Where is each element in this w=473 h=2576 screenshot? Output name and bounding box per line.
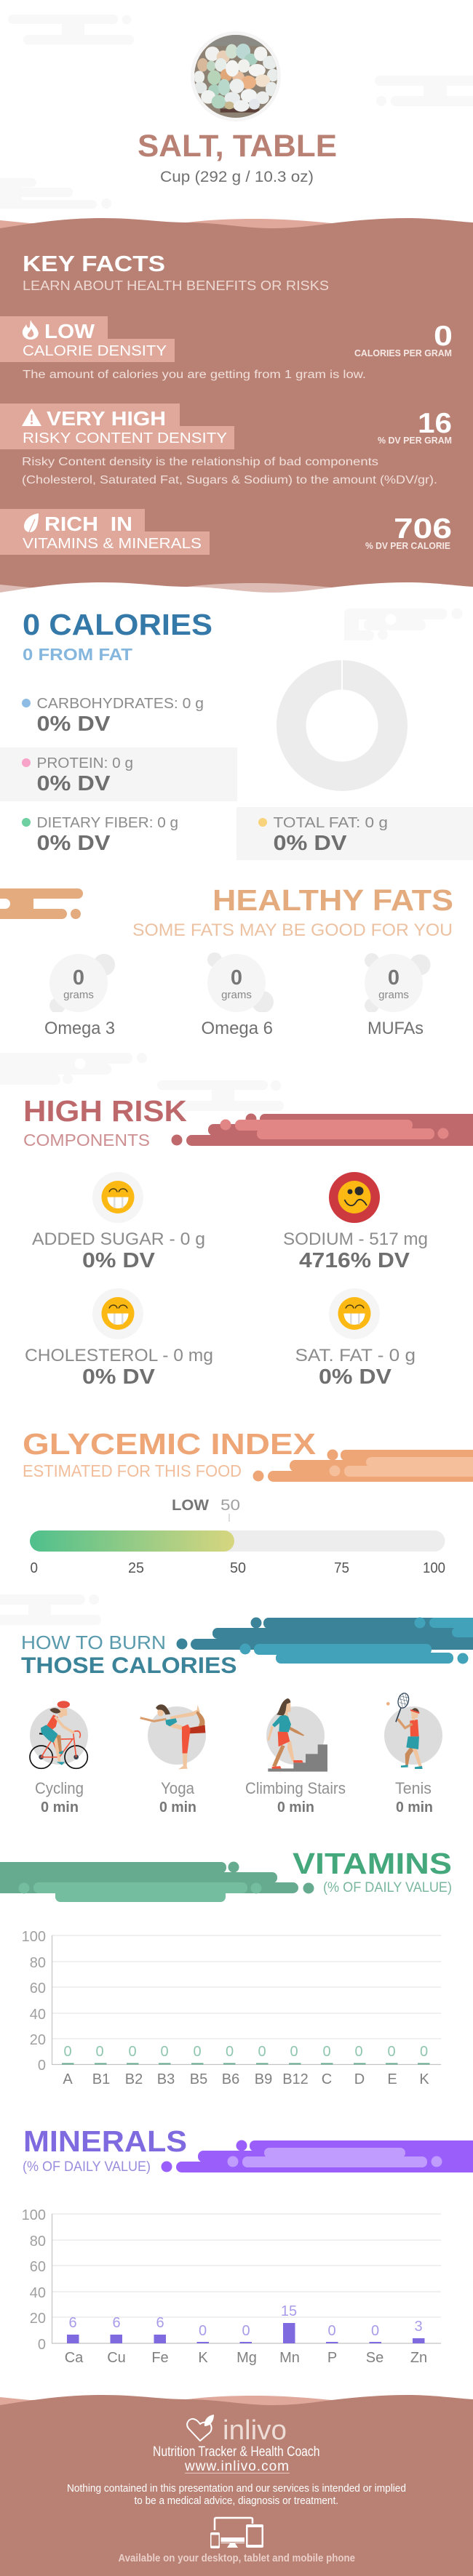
fact: rich in vitamins and minerals	[0, 509, 452, 555]
bar chart: minerals: 3	[414, 2319, 423, 2335]
bar chart: vitamins: 0	[160, 2044, 169, 2060]
icon: yoga figure	[140, 1704, 205, 1769]
decoration: orange bars	[253, 1450, 473, 1482]
bar chart: minerals: 6	[156, 2315, 164, 2331]
bar chart: vitamins: 0	[258, 2044, 266, 2060]
gauge scale: 75	[334, 1560, 349, 1576]
bar chart: minerals	[22, 2207, 441, 2366]
gauge value: 50	[220, 1496, 240, 1514]
activity: tennis: Tenis	[395, 1779, 432, 1797]
fact: risky content density: Risky Content density is the relationship of bad components	[22, 456, 378, 468]
fact: calorie density: LOW	[44, 320, 95, 342]
subheading: ESTIMATED FOR THIS FOOD	[23, 1461, 242, 1480]
item: saturated fat: SAT. FAT - 0 g	[295, 1346, 416, 1365]
fact: risky content density: (Cholesterol, Saturated Fat, Sugars & Sodium) to the amount (%DV/gr).	[22, 474, 437, 486]
tagline: Nutrition Tracker & Health Coach	[153, 2444, 320, 2460]
activity: climbing stairs: Climbing Stairs	[245, 1779, 346, 1797]
bar chart: vitamins: E	[387, 2071, 397, 2087]
item: cholesterol: 0% DV	[82, 1365, 156, 1389]
subheading: (% OF DAILY VALUE)	[23, 2159, 151, 2175]
bar chart: vitamins: 0	[420, 2044, 428, 2060]
icon: tennis player	[386, 1692, 423, 1769]
logo: inlivo	[187, 2415, 287, 2446]
panel: healthy fats	[0, 883, 453, 1038]
bar chart: minerals: 100	[22, 2207, 46, 2223]
bar chart: vitamins: A	[63, 2071, 73, 2087]
gauge value	[172, 1496, 240, 1522]
macro: protein: 0% DV	[36, 772, 111, 795]
bar chart: vitamins: 0	[95, 2044, 104, 2060]
subheading: from fat: 0 FROM FAT	[23, 645, 132, 664]
bar chart: vitamins: B2	[125, 2071, 143, 2087]
subheading: components: COMPONENTS	[23, 1131, 150, 1149]
macro: dietary fiber	[22, 815, 178, 855]
bar chart: vitamins: 0	[38, 2058, 46, 2074]
activity: yoga: Yoga	[161, 1779, 195, 1797]
decoration: red bars	[172, 1114, 473, 1146]
icon: cyclist	[30, 1701, 87, 1768]
bar chart: minerals: Mn	[279, 2350, 300, 2366]
activity: climbing stairs	[245, 1698, 346, 1815]
heading: high risk: HIGH RISK	[23, 1094, 187, 1128]
activity: cycling	[30, 1701, 88, 1815]
decoration: orange bars	[0, 888, 84, 919]
disclaimer: to be a medical advice, diagnosis or treatment.	[134, 2495, 338, 2507]
icon: happy face	[102, 1297, 134, 1330]
panel: high risk components	[23, 1094, 473, 1389]
item: omega 3	[44, 954, 115, 1038]
activity: tennis: 0 min	[396, 1799, 433, 1815]
panel: title header	[138, 31, 337, 185]
panel: key facts	[0, 218, 473, 603]
item: cholesterol: CHOLESTEROL - 0 mg	[25, 1346, 213, 1365]
gauge scale: 50	[230, 1560, 246, 1576]
icon: flame	[23, 320, 39, 340]
bar chart: vitamins: 0	[226, 2044, 234, 2060]
heading: how to burn: HOW TO BURN	[21, 1632, 166, 1653]
item: added sugar: ADDED SUGAR - 0 g	[32, 1229, 205, 1249]
fact: calorie density: The amount of calories you are getting from 1 gram is low.	[23, 369, 366, 381]
macro: carbohydrates: CARBOHYDRATES: 0 g	[36, 696, 204, 712]
serving size: Cup (292 g / 10.3 oz)	[160, 169, 314, 185]
item: omega 6: Omega 6	[201, 1019, 273, 1038]
bar chart: vitamins: 60	[30, 1981, 46, 1997]
bar chart: vitamins: 80	[30, 1955, 46, 1971]
decoration: purple bars	[162, 2140, 473, 2172]
fact: risky content density: % DV PER GRAM	[378, 436, 452, 446]
bar chart: vitamins: 100	[22, 1929, 46, 1945]
macro: total fat	[236, 807, 473, 860]
gauge scale: 100	[423, 1560, 445, 1576]
bar chart: vitamins: 0	[63, 2044, 72, 2060]
panel: minerals	[22, 2124, 473, 2366]
macro: carbohydrates	[22, 696, 204, 736]
bar chart: minerals: Mg	[236, 2350, 257, 2366]
fact: rich in vitamins and minerals: VITAMINS & MINERALS	[23, 536, 202, 552]
item: omega 3: 0	[73, 966, 84, 990]
item: omega 3: grams	[63, 989, 94, 1001]
item: mufas: grams	[378, 989, 409, 1001]
bar chart: vitamins: 0	[128, 2044, 137, 2060]
bar chart: vitamins: 40	[30, 2007, 46, 2023]
bar chart: vitamins: 0	[290, 2044, 298, 2060]
website link: www.inlivo.com	[184, 2459, 289, 2474]
macro: dietary fiber: DIETARY FIBER: 0 g	[36, 815, 178, 831]
fact: calorie density: CALORIE DENSITY	[23, 343, 167, 359]
gauge scale: 25	[128, 1560, 144, 1576]
fact: calorie density	[0, 316, 453, 381]
activity: yoga: 0 min	[159, 1799, 196, 1815]
item: omega 3: Omega 3	[44, 1019, 115, 1038]
item: sodium	[283, 1172, 428, 1272]
donut chart	[291, 660, 393, 777]
bar chart: minerals: 6	[68, 2315, 77, 2331]
food photo: eggs in circle	[191, 31, 281, 121]
item: added sugar: 0% DV	[82, 1249, 156, 1272]
bar chart: vitamins: C	[322, 2071, 332, 2087]
bar chart: minerals: 40	[30, 2285, 46, 2301]
panel: how to burn calories	[21, 1617, 473, 1815]
item: saturated fat	[295, 1288, 416, 1389]
bar chart: minerals: Se	[366, 2350, 383, 2366]
bar chart: minerals: Cu	[107, 2350, 126, 2366]
heading: key facts: KEY FACTS	[23, 251, 165, 276]
bar chart: minerals: Fe	[151, 2350, 169, 2366]
item: mufas: MUFAs	[367, 1019, 424, 1038]
decoration: green bars	[0, 1861, 314, 1902]
activity: cycling: 0 min	[41, 1799, 79, 1815]
icon: leaf	[24, 513, 39, 532]
item: saturated fat: 0% DV	[319, 1365, 392, 1389]
bar chart: vitamins: B6	[222, 2071, 239, 2087]
activity: climbing stairs: 0 min	[277, 1799, 314, 1815]
bar chart: vitamins: 0	[322, 2044, 331, 2060]
macro: total fat: 0% DV	[274, 832, 347, 855]
bar chart: minerals: 0	[371, 2323, 379, 2339]
panel: glycemic index	[23, 1427, 473, 1576]
heading: glycemic index: GLYCEMIC INDEX	[23, 1427, 316, 1461]
fact: rich in vitamins and minerals: RICH IN	[44, 513, 132, 535]
gauge scale	[31, 1560, 445, 1576]
bar chart: minerals: 0	[242, 2323, 250, 2339]
bar chart: vitamins: 0	[354, 2044, 363, 2060]
activity: tennis	[384, 1692, 442, 1815]
fact: rich in vitamins and minerals: 706	[394, 513, 452, 545]
subheading: (% OF DAILY VALUE)	[323, 1880, 452, 1895]
bar chart: minerals: 80	[30, 2234, 46, 2250]
bar chart: minerals: 0	[199, 2323, 207, 2339]
bar chart: minerals: 60	[30, 2259, 46, 2275]
glycemic gauge bar	[30, 1530, 445, 1552]
decoration: teal bars	[176, 1617, 473, 1664]
icon: happy face	[338, 1297, 371, 1330]
icon: warning triangle	[22, 409, 41, 426]
heading: minerals: MINERALS	[23, 2124, 187, 2158]
fact: rich in vitamins and minerals: % DV PER CALORIE	[365, 541, 450, 551]
bar chart: minerals: 15	[281, 2303, 297, 2319]
bar chart: vitamins	[22, 1929, 441, 2087]
fact: risky content density: RISKY CONTENT DENSITY	[23, 430, 227, 446]
bar chart: vitamins: B5	[190, 2071, 207, 2087]
item: added sugar	[32, 1172, 205, 1272]
fact: risky content density: VERY HIGH	[47, 407, 166, 430]
bar chart: vitamins: D	[354, 2071, 365, 2087]
icon: stair climber	[267, 1698, 327, 1772]
heading: calories: 0 CALORIES	[23, 608, 212, 641]
fact: risky content density: 16	[418, 408, 452, 439]
disclaimer: Nothing contained in this presentation and our services is intended or implied	[67, 2483, 406, 2495]
panel: vitamins	[0, 1847, 452, 2087]
icon: devices	[210, 2518, 263, 2548]
fact: calorie density: 0	[434, 321, 453, 352]
item: cholesterol	[25, 1288, 213, 1389]
subheading: LEARN ABOUT HEALTH BENEFITS OR RISKS	[23, 278, 329, 293]
heading: vitamins: VITAMINS	[293, 1847, 452, 1880]
activity: cycling: Cycling	[35, 1779, 84, 1797]
bar chart: minerals: 0	[327, 2323, 336, 2339]
bar chart: vitamins: B3	[157, 2071, 175, 2087]
item: sodium: SODIUM - 517 mg	[283, 1229, 428, 1249]
bar chart: vitamins: B12	[282, 2071, 309, 2087]
heading: those calories: THOSE CALORIES	[21, 1652, 237, 1678]
bar chart: minerals: K	[198, 2350, 208, 2366]
panel: calories	[0, 608, 473, 860]
icon: worried face	[338, 1181, 371, 1213]
item: sodium: 4716% DV	[299, 1249, 410, 1272]
bar chart: vitamins: B9	[255, 2071, 272, 2087]
macro: dietary fiber: 0% DV	[36, 832, 111, 855]
item: mufas	[365, 953, 431, 1038]
fact: risky content density	[0, 404, 452, 486]
bar chart: minerals: 6	[112, 2315, 121, 2331]
bar chart: vitamins: 0	[387, 2044, 396, 2060]
availability note: Available on your desktop, tablet and mobile phone	[118, 2553, 355, 2564]
bar chart: minerals: 0	[38, 2337, 46, 2353]
bar chart: vitamins: K	[419, 2071, 429, 2087]
item: omega 6	[201, 952, 274, 1038]
gauge scale: 0	[31, 1560, 38, 1576]
panel: footer	[0, 2395, 473, 2576]
logo: inlivo: inlivo	[223, 2415, 287, 2446]
bar chart: minerals: P	[327, 2350, 337, 2366]
activity: yoga	[140, 1704, 206, 1815]
macro: protein: PROTEIN: 0 g	[36, 755, 133, 771]
subheading: SOME FATS MAY BE GOOD FOR YOU	[132, 920, 453, 940]
macro: protein	[0, 747, 237, 801]
fact: calorie density: CALORIES PER GRAM	[354, 348, 452, 358]
icon: happy face	[102, 1181, 134, 1213]
macro: carbohydrates: 0% DV	[36, 713, 111, 736]
bar chart: minerals: Zn	[410, 2350, 427, 2366]
bar chart: minerals: 20	[30, 2311, 46, 2327]
macro: total fat: TOTAL FAT: 0 g	[274, 815, 388, 831]
title: SALT, TABLE	[138, 129, 337, 164]
heading: healthy fats: HEALTHY FATS	[212, 883, 453, 917]
item: omega 6: grams	[221, 989, 252, 1001]
disclaimer	[67, 2483, 406, 2507]
bar chart: vitamins: 20	[30, 2032, 46, 2048]
bar chart: minerals: Ca	[65, 2350, 84, 2366]
item: mufas: 0	[388, 966, 400, 990]
item: omega 6: 0	[231, 966, 242, 990]
bar chart: vitamins: 0	[193, 2044, 202, 2060]
gauge value: LOW	[172, 1496, 210, 1514]
bar chart: vitamins: B1	[92, 2071, 110, 2087]
